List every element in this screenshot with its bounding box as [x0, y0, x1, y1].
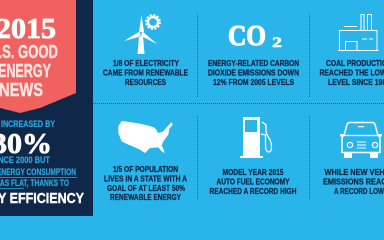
text: model year 2015 [210, 167, 296, 196]
panel: carbon dioxide [208, 20, 299, 87]
panel: left summary [0, 0, 93, 216]
text: 1/5 of population: RENEWABLE ENERGY [110, 192, 181, 202]
text: energy-related carbon: DIOXIDE EMISSIONS DOWN [208, 68, 299, 78]
text: energy-related carbon: 12% FROM 2005 LEVELS [213, 77, 294, 87]
text: energy efficiency: Y EFFICIENCY [0, 190, 84, 207]
text: 1/5 of population [104, 164, 187, 202]
text: increased by: INCREASED BY [1, 119, 55, 129]
text: energy consumption: ENERGY CONSUMPTION [0, 167, 76, 177]
text: 1/5 of population: 1/5 OF POPULATION [113, 164, 178, 174]
text: energy-related carbon: ENERGY-RELATED CARBON [208, 58, 299, 68]
text: 1/5 of population: GOAL OF AT LEAST 50% [107, 183, 185, 193]
heading line 3: NEWS [0, 79, 43, 100]
banner: 2015 U.S. good energy news [0, 0, 76, 113]
text: model year 2015: MODEL YEAR 2015 [222, 167, 284, 177]
icon: factory [338, 14, 378, 50]
text: model year 2015: AUTO FUEL ECONOMY [216, 176, 290, 186]
icon: USA map [118, 121, 173, 153]
panel: vehicle emissions [323, 122, 384, 196]
text: 1/8 of electricity: CAME FROM RENEWABLE [103, 68, 188, 78]
text: 1/8 of electricity: 1/8 OF ELECTRICITY [113, 58, 179, 68]
panel: fuel economy [210, 117, 296, 196]
text: 1/5 of population: LIVES IN A STATE WITH A [104, 174, 187, 184]
text: model year 2015: REACHED A RECORD HIGH [210, 186, 296, 196]
icon: wind turbine and gear [124, 15, 160, 54]
text: 1/8 of electricity [103, 58, 188, 87]
panel: renewable electricity [103, 15, 188, 87]
icon: CO2: 2 [272, 35, 282, 51]
text: new vehicle emissions [323, 167, 384, 196]
panel: population [104, 121, 187, 202]
text: coal production [320, 58, 384, 87]
icon: car [340, 122, 382, 158]
text: energy-related carbon [208, 58, 299, 87]
heading line 2: ENERGY [0, 60, 51, 81]
icon: gas pump [240, 117, 271, 158]
icon: CO2: CO [228, 20, 266, 52]
panel: coal production [320, 14, 384, 87]
text: 1/8 of electricity: RESOURCES [125, 77, 166, 87]
